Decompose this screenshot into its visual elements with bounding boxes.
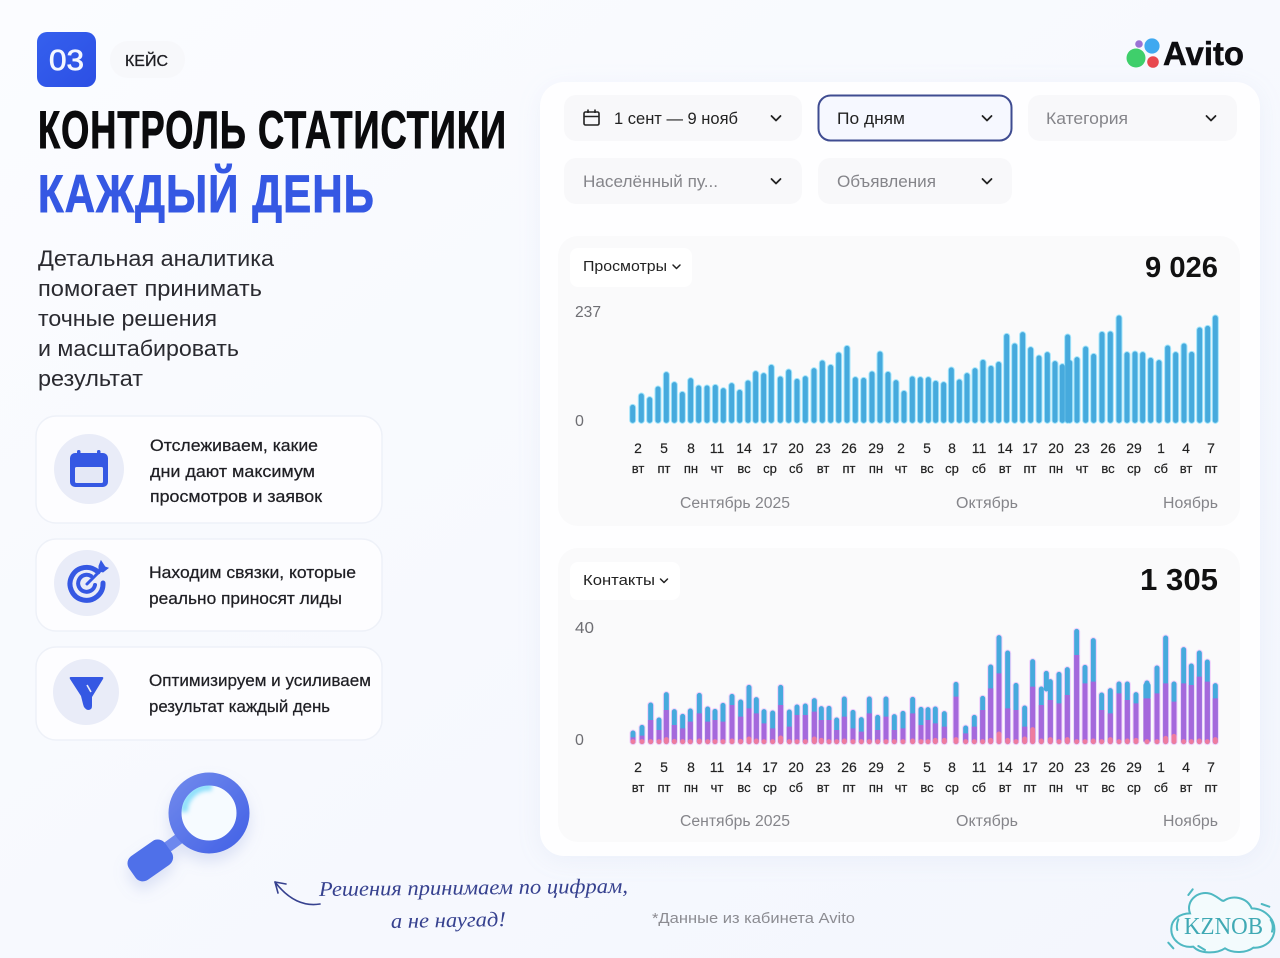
card: tracking days [36, 416, 382, 523]
dropdown: contacts [570, 562, 680, 600]
axis: views dates: чт [1076, 461, 1088, 476]
axis: views dates: 20 [788, 440, 804, 456]
axis: contacts dates: пн [684, 780, 698, 795]
badge: case number: 03 [49, 45, 84, 77]
axis: contacts dates: вс [920, 780, 934, 795]
axis: contacts dates: Ноябрь [1163, 813, 1218, 830]
axis: contacts dates: ср [945, 780, 959, 795]
axis: contacts y: 40 [575, 620, 594, 637]
filter: date range: 1 сент — 9 нояб [614, 109, 738, 128]
axis: contacts dates: 5 [923, 759, 931, 775]
axis: views dates: сб [789, 461, 803, 476]
axis: contacts y [575, 620, 594, 749]
axis: views dates: пт [658, 461, 671, 476]
dropdown: views: Просмотры [583, 258, 667, 275]
handwritten note: Решения принимаем по цифрам, [318, 874, 628, 901]
watermark: KZNOB cloud: KZNOB [1184, 914, 1263, 940]
axis: contacts dates: чт [1076, 780, 1088, 795]
tag: case label [110, 41, 185, 78]
axis: contacts dates: 11 [710, 759, 724, 775]
axis: views dates: пн [684, 461, 698, 476]
axis: contacts dates: 7 [1207, 759, 1215, 775]
icon: small calendar [584, 110, 599, 125]
axis: views dates: 17 [1022, 440, 1038, 456]
axis: contacts dates: пт [1204, 780, 1218, 795]
axis: contacts dates: 20 [788, 759, 804, 775]
axis: views dates: вс [737, 461, 751, 476]
axis: views dates: 7 [1207, 440, 1215, 456]
axis: views dates: 26 [841, 440, 857, 456]
title: КАЖДЫЙ ДЕНЬ [38, 163, 375, 224]
axis: views dates: сб [1154, 461, 1168, 476]
watermark: KZNOB cloud [1168, 889, 1274, 952]
axis: contacts dates: чт [895, 780, 907, 795]
axis: contacts y: 0 [575, 732, 584, 749]
axis: contacts dates: 17 [1022, 759, 1038, 775]
axis: views dates: 8 [948, 440, 956, 456]
axis: contacts dates [632, 759, 1218, 830]
axis: contacts dates: сб [1154, 780, 1168, 795]
axis: views dates: 17 [762, 440, 778, 456]
axis: views dates: 23 [1074, 440, 1090, 456]
axis: contacts dates: пт [842, 780, 856, 795]
axis: views dates: 26 [1100, 440, 1116, 456]
axis: contacts dates: вт [1180, 780, 1192, 795]
title [38, 101, 507, 224]
axis: contacts dates: сб [972, 780, 986, 795]
logo: Avito: Avito [1163, 35, 1244, 72]
axis: views dates: сб [972, 461, 986, 476]
panel: contacts chart [558, 548, 1240, 842]
axis: views dates: пн [1049, 461, 1063, 476]
axis: views dates: чт [711, 461, 723, 476]
axis: views dates: 11 [710, 440, 724, 456]
axis: contacts dates: 23 [1074, 759, 1090, 775]
icon: magnifying glass [124, 779, 243, 885]
axis: views dates: 14 [736, 440, 752, 456]
axis: contacts dates: вт [632, 780, 644, 795]
axis: contacts dates: вт [817, 780, 829, 795]
filter: category [1028, 95, 1237, 141]
axis: contacts dates: пн [869, 780, 883, 795]
title: КОНТРОЛЬ СТАТИСТИКИ [38, 101, 507, 160]
axis: views dates: вт [999, 461, 1011, 476]
axis: views dates: 1 [1157, 440, 1165, 456]
axis: views dates: 29 [868, 440, 884, 456]
axis: views dates: 4 [1182, 440, 1190, 456]
axis: views dates: ср [945, 461, 959, 476]
axis: views dates: Сентябрь 2025 [680, 495, 790, 512]
axis: contacts dates: 14 [736, 759, 752, 775]
axis: contacts dates: ср [763, 780, 777, 795]
intro text: результат [38, 366, 143, 391]
total: views: 9 026 [1145, 252, 1218, 284]
handwritten note [318, 874, 628, 933]
axis: views dates: Октябрь [956, 495, 1018, 512]
axis: contacts dates: 11 [972, 759, 986, 775]
badge: case number [37, 32, 96, 87]
icon: target [70, 561, 108, 600]
stacked bar chart: contacts [633, 631, 1215, 742]
axis: views dates [632, 440, 1218, 512]
axis: contacts dates: Сентябрь 2025 [680, 813, 790, 830]
intro text: помогает принимать [38, 276, 262, 301]
card: tracking days: дни дают максимум [150, 462, 315, 481]
panel: analytics dashboard [540, 82, 1260, 856]
axis: views dates: ср [763, 461, 777, 476]
axis: contacts dates: 29 [868, 759, 884, 775]
axis: views dates: 2 [634, 440, 642, 456]
icon: funnel [70, 677, 103, 710]
axis: views dates: чт [895, 461, 907, 476]
card: tracking days: просмотров и заявок [150, 487, 323, 506]
axis: contacts dates: 5 [660, 759, 668, 775]
axis: views y: 0 [575, 413, 584, 430]
filter: by days (active) [818, 96, 1012, 140]
axis: contacts dates: пт [658, 780, 671, 795]
axis: views dates: 5 [923, 440, 931, 456]
handwritten note: а не наугад! [391, 907, 506, 933]
axis: views dates: 29 [1126, 440, 1142, 456]
axis: contacts dates: 8 [948, 759, 956, 775]
card: optimising [36, 647, 382, 740]
axis: contacts dates: 26 [1100, 759, 1116, 775]
axis: contacts dates: 2 [634, 759, 642, 775]
filter: by days (active): По дням [837, 109, 905, 128]
axis: views dates: вт [817, 461, 829, 476]
axis: contacts dates: вс [737, 780, 751, 795]
axis: contacts dates: сб [789, 780, 803, 795]
card: optimising: Оптимизируем и усиливаем [149, 671, 371, 690]
axis: views y [575, 304, 601, 430]
total: contacts: 1 305 [1140, 562, 1218, 597]
axis: views dates: пн [869, 461, 883, 476]
bar chart: views [633, 318, 1215, 420]
axis: views dates: Ноябрь [1163, 495, 1218, 512]
card: finding links: реально приносят лиды [149, 589, 342, 608]
axis: contacts dates: 4 [1182, 759, 1190, 775]
filter: listings: Объявления [837, 172, 936, 191]
card: tracking days: Отслеживаем, какие [150, 436, 318, 455]
axis: views dates: 14 [997, 440, 1013, 456]
axis: contacts dates: пн [1049, 780, 1063, 795]
axis: views dates: 2 [897, 440, 905, 456]
logo: Avito [1126, 35, 1244, 72]
card: finding links [36, 539, 382, 631]
axis: contacts dates: 20 [1048, 759, 1064, 775]
intro text [38, 246, 275, 391]
icon: calendar [70, 450, 108, 487]
card: optimising: результат каждый день [149, 697, 330, 716]
axis: contacts dates: Октябрь [956, 813, 1018, 830]
axis: views dates: ср [1127, 461, 1141, 476]
axis: views dates: 5 [660, 440, 668, 456]
axis: contacts dates: пт [1024, 780, 1037, 795]
intro text: точные решения [38, 306, 217, 331]
axis: views dates: вс [920, 461, 934, 476]
filter: date range [564, 95, 802, 141]
intro text: и масштабировать [38, 336, 239, 361]
axis: contacts dates: ср [1127, 780, 1141, 795]
axis: views dates: вт [632, 461, 644, 476]
axis: views dates: 11 [972, 440, 986, 456]
axis: views dates: пт [842, 461, 856, 476]
arrow: handwritten [275, 882, 320, 905]
panel: views chart [558, 236, 1240, 526]
card: finding links: Находим связки, которые [149, 563, 356, 582]
axis: views y: 237 [575, 304, 601, 321]
dropdown: views [570, 248, 692, 287]
axis: views dates: 20 [1048, 440, 1064, 456]
axis: views dates: вс [1101, 461, 1115, 476]
dropdown: contacts: Контакты [583, 572, 655, 589]
axis: contacts dates: 29 [1126, 759, 1142, 775]
tag: case label: КЕЙС [125, 51, 168, 70]
axis: contacts dates: 8 [687, 759, 695, 775]
axis: contacts dates: 1 [1157, 759, 1165, 775]
axis: views dates: вт [1180, 461, 1192, 476]
axis: views dates: 8 [687, 440, 695, 456]
axis: contacts dates: чт [711, 780, 723, 795]
axis: contacts dates: 23 [815, 759, 831, 775]
axis: views dates: пт [1204, 461, 1218, 476]
axis: contacts dates: вс [1101, 780, 1115, 795]
intro text: Детальная аналитика [38, 246, 275, 271]
axis: contacts dates: вт [999, 780, 1011, 795]
axis: views dates: пт [1024, 461, 1037, 476]
axis: contacts dates: 2 [897, 759, 905, 775]
axis: contacts dates: 17 [762, 759, 778, 775]
footnote: *Данные из кабинета Avito [652, 910, 855, 927]
axis: contacts dates: 26 [841, 759, 857, 775]
axis: views dates: 23 [815, 440, 831, 456]
filter: locality [564, 158, 802, 204]
filter: listings [818, 158, 1012, 204]
axis: contacts dates: 14 [997, 759, 1013, 775]
filter: locality: Населённый пу... [583, 172, 718, 191]
filter: category: Категория [1046, 109, 1128, 128]
